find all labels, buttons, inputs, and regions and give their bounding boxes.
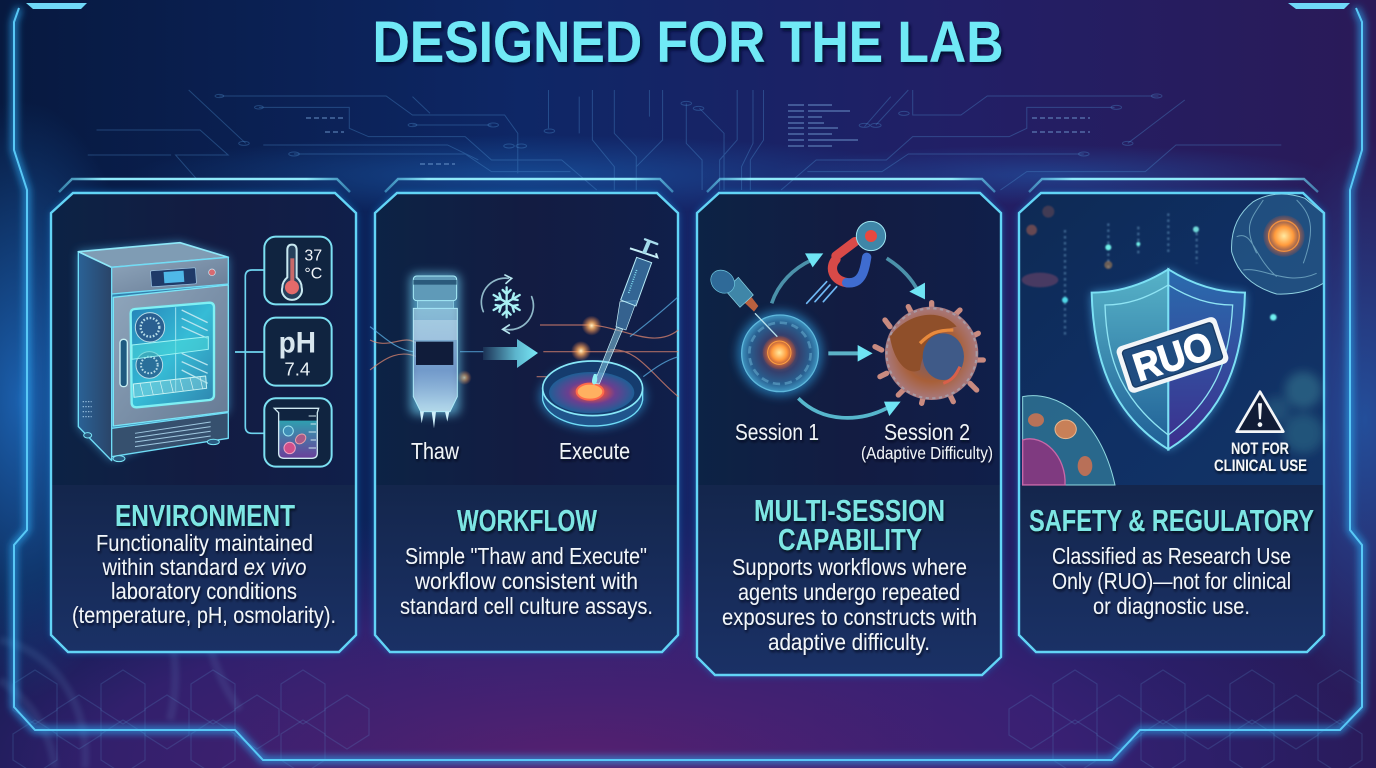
body text — [1052, 543, 1291, 619]
icon: cell top right — [1232, 194, 1323, 294]
body text — [400, 543, 653, 619]
heading — [754, 493, 945, 557]
title: DESIGNED FOR THE LAB — [372, 10, 1004, 75]
body text: Simple "Thaw and Execute" — [405, 543, 647, 569]
arrows: session flow — [772, 253, 925, 418]
icon: pH 7.4: 7.4 — [284, 358, 310, 379]
body text: Only (RUO)—not for clinical — [1052, 568, 1291, 594]
panel: multi-session capability — [697, 179, 1001, 675]
body text: exposures to constructs with — [722, 604, 977, 630]
icon: incubator — [78, 243, 228, 462]
heading: CAPABILITY — [778, 522, 922, 557]
hexagon pattern right — [1009, 670, 1362, 768]
icon: thaw cycle snowflake — [481, 275, 533, 333]
icon: thermometer 37 C: 37 — [304, 248, 322, 265]
label: Session 1: Session 1 — [735, 419, 819, 445]
body text: workflow consistent with — [414, 568, 638, 594]
panel: environment — [51, 179, 356, 652]
icon: thermometer 37 C: °C — [304, 265, 322, 282]
icon: shield — [1092, 269, 1245, 449]
heading: WORKFLOW — [457, 503, 598, 538]
label: not for clinical use: NOT FOR — [1231, 440, 1289, 458]
body text: or diagnostic use. — [1093, 593, 1250, 619]
panel: safety and regulatory — [1019, 179, 1324, 652]
label: not for clinical use — [1214, 440, 1307, 475]
heading: MULTI-SESSION — [754, 493, 945, 528]
hexagon pattern left — [13, 670, 369, 768]
body text: (temperature, pH, osmolarity). — [72, 602, 336, 628]
corner bracket right — [1288, 3, 1350, 9]
corner bracket left — [26, 3, 87, 9]
connector lines — [235, 270, 264, 433]
icon: warning triangle — [1237, 392, 1283, 432]
body text: Supports workflows where — [732, 554, 967, 580]
body text: standard cell culture assays. — [400, 593, 653, 619]
body text — [72, 530, 336, 628]
panel: workflow — [370, 179, 678, 652]
body text: agents undergo repeated — [738, 579, 960, 605]
icon: pH 7.4 — [264, 318, 332, 386]
icon: session 2 complex cell — [875, 303, 983, 403]
body text — [722, 554, 977, 655]
light streaks — [370, 297, 678, 397]
icon: magnet with cell — [807, 221, 886, 303]
body text: adaptive difficulty. — [768, 629, 930, 655]
arrow: thaw to execute — [483, 339, 538, 368]
label: Thaw: Thaw — [411, 438, 460, 464]
data rain background — [1022, 206, 1323, 453]
body text: Functionality maintained — [96, 530, 313, 556]
DNA helix decoration — [0, 500, 240, 768]
label: Execute: Execute — [559, 438, 630, 464]
icon: thermometer 37 C — [264, 237, 332, 304]
icon: petri dish and pipette — [539, 239, 657, 428]
body text: Classified as Research Use — [1052, 543, 1291, 569]
icon: session 1 cell with injector — [706, 265, 823, 396]
heading: ENVIRONMENT — [115, 498, 295, 533]
badge: RUO: RUO — [1128, 324, 1218, 390]
icon: cell bottom left — [1023, 396, 1115, 485]
icon: beaker — [264, 398, 332, 467]
label: not for clinical use: CLINICAL USE — [1214, 457, 1307, 475]
icon: pH 7.4: pH — [279, 326, 316, 359]
label: Session 2: Session 2 — [884, 419, 970, 445]
body text: within standard ex vivo — [102, 554, 307, 580]
data readout lines — [306, 105, 1090, 164]
body text: laboratory conditions — [111, 578, 297, 604]
label: adaptive difficulty: (Adaptive Difficulty) — [861, 443, 993, 463]
circuit traces — [88, 90, 1281, 190]
icon: frozen vial — [410, 273, 460, 428]
